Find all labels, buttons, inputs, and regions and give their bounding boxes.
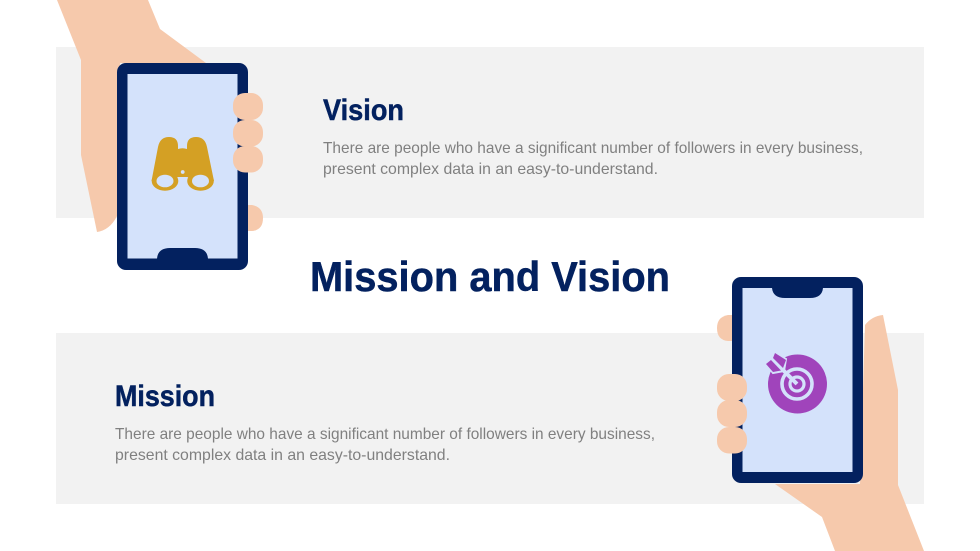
text block: mission [115, 380, 655, 464]
text block: vision [323, 94, 863, 178]
body: vision: present complex data in an easy-to-understand. [323, 161, 658, 178]
fingers: upper three [233, 93, 263, 172]
body: vision: There are people who have a significant number of followers in every business, [323, 140, 863, 157]
heading: mission: Mission [115, 380, 215, 413]
icon: binoculars [152, 137, 214, 191]
body: vision [323, 140, 863, 178]
fingers: lower three [717, 374, 747, 454]
hand: bottom right [775, 315, 924, 551]
phone: vision [117, 63, 248, 270]
title: Mission and Vision [310, 253, 670, 300]
panel: vision background [56, 47, 924, 218]
hand: top left [57, 0, 206, 232]
body: mission: There are people who have a significant number of followers in every business, [115, 426, 655, 443]
finger: lower [245, 205, 263, 231]
icon: target with arrow [766, 353, 827, 414]
illustration: hand holding phone with binoculars [57, 0, 263, 270]
phone: mission [732, 277, 863, 483]
body: mission: present complex data in an easy-to-understand. [115, 447, 450, 464]
body: mission [115, 426, 655, 464]
heading: vision: Vision [323, 94, 404, 127]
finger: upper [717, 315, 735, 341]
panel: mission background [56, 333, 924, 504]
illustration: hand holding phone with target [717, 277, 924, 551]
